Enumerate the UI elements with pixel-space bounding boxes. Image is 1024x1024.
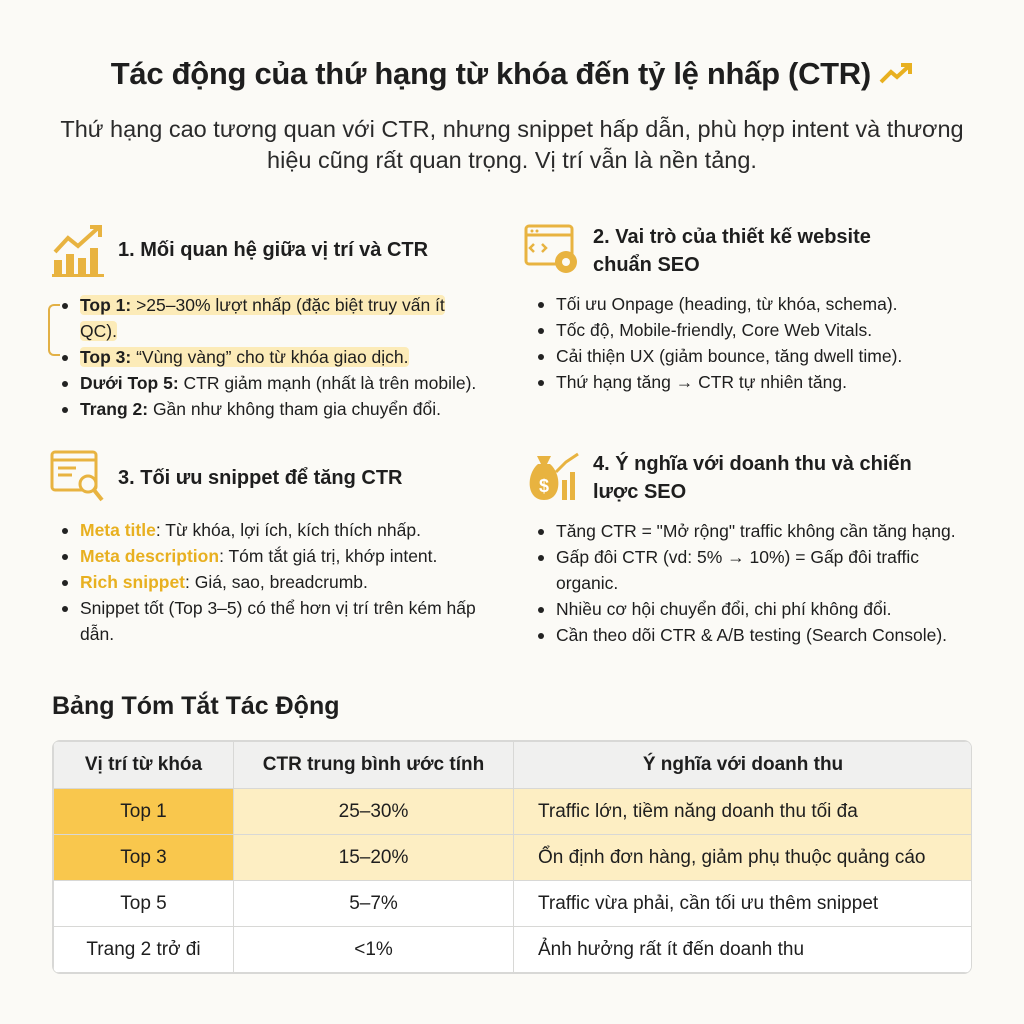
bullets 1: Top 1: >25–30% lượt nhấp (đặc biệt truy vấn ít xyxy=(80,295,445,315)
summary table: Traffic lớn, tiềm năng doanh thu tối đa xyxy=(538,800,858,822)
bullets 2: Tối ưu Onpage (heading, từ khóa, schema). xyxy=(556,294,898,314)
summary table: Top 3 xyxy=(120,846,167,868)
summary table: Top 5 xyxy=(120,892,167,914)
heading 4 xyxy=(593,452,912,503)
icon: money bag chart: $ xyxy=(539,476,549,496)
title: Tác động của thứ hạng từ khóa đến tỷ lệ nhấp (CTR) xyxy=(111,56,871,91)
table heading: Bảng Tóm Tắt Tác Động xyxy=(52,692,340,720)
summary table: 25–30% xyxy=(339,800,408,822)
panel: section 1 xyxy=(48,225,476,419)
summary table: Vị trí từ khóa xyxy=(85,754,202,775)
bullets 1: Dưới Top 5: CTR giảm mạnh (nhất là trên mobile). xyxy=(80,373,476,393)
heading 4: lược SEO xyxy=(593,481,686,503)
icon: snippet search xyxy=(50,450,104,502)
bullets 3: Meta description: Tóm tắt giá trị, khớp intent. xyxy=(80,546,437,566)
icon: website gear xyxy=(524,224,577,273)
bullets 4 xyxy=(538,521,956,645)
bullets 4: Gấp đôi CTR (vd: 5% → 10%) = Gấp đôi traffic xyxy=(556,547,919,567)
heading 1: 1. Mối quan hệ giữa vị trí và CTR xyxy=(118,239,428,261)
bracket connector xyxy=(48,304,60,356)
heading 3: 3. Tối ưu snippet để tăng CTR xyxy=(118,467,402,489)
bullets 3: Rich snippet: Giá, sao, breadcrumb. xyxy=(80,572,368,592)
heading 2: 2. Vai trò của thiết kế website xyxy=(593,226,871,248)
bullets 1: QC). xyxy=(80,321,117,341)
bullets 4: Nhiều cơ hội chuyển đổi, chi phí không đổi. xyxy=(556,599,891,619)
summary table: 5–7% xyxy=(349,892,398,914)
summary table: Ảnh hưởng rất ít đến doanh thu xyxy=(538,938,804,960)
bullets 2 xyxy=(538,294,902,392)
bullets 4: organic. xyxy=(556,573,618,593)
bullets 4: Cần theo dõi CTR & A/B testing (Search Console). xyxy=(556,625,947,645)
summary table: CTR trung bình ước tính xyxy=(263,754,484,775)
bullets 3: Meta title: Từ khóa, lợi ích, kích thích nhấp. xyxy=(80,520,421,540)
subtitle: Thứ hạng cao tương quan với CTR, nhưng snippet hấp dẫn, phù hợp intent và thương xyxy=(60,116,964,142)
heading 2: chuẩn SEO xyxy=(593,254,700,276)
panel: section 2 xyxy=(524,224,902,392)
icon: money bag chart xyxy=(530,452,579,500)
bullets 1 xyxy=(62,295,476,419)
summary table: Ổn định đơn hàng, giảm phụ thuộc quảng cáo xyxy=(538,846,925,868)
bullets 2: Cải thiện UX (giảm bounce, tăng dwell time). xyxy=(556,346,902,366)
heading 2 xyxy=(593,226,871,276)
bullets 3: Snippet tốt (Top 3–5) có thể hơn vị trí trên kém hấp dẫn. xyxy=(80,598,476,644)
panel: section 3 xyxy=(50,450,476,644)
icon: growth chart xyxy=(52,225,104,277)
summary table: Traffic vừa phải, cần tối ưu thêm snippet xyxy=(538,892,878,914)
bullets 1: Top 3: “Vùng vàng” cho từ khóa giao dịch. xyxy=(80,347,409,367)
heading 4: 4. Ý nghĩa với doanh thu và chiến xyxy=(593,453,912,475)
summary table: Top 1 xyxy=(120,800,167,822)
bullets 3 xyxy=(62,520,476,644)
bullets 2: Tốc độ, Mobile-friendly, Core Web Vitals. xyxy=(556,320,872,340)
bullets 2: Thứ hạng tăng → CTR tự nhiên tăng. xyxy=(556,372,847,392)
summary table xyxy=(52,740,972,974)
summary table: Ý nghĩa với doanh thu xyxy=(643,754,843,775)
panel: section 4 xyxy=(530,452,956,645)
subtitle: hiệu cũng rất quan trọng. Vị trí vẫn là nền tảng. xyxy=(267,147,757,173)
subtitle xyxy=(60,116,964,173)
summary table: <1% xyxy=(354,938,393,960)
bullets 4: Tăng CTR = "Mở rộng" traffic không cần tăng hạng. xyxy=(556,521,956,541)
summary table: Trang 2 trở đi xyxy=(86,938,201,960)
bullets 1: Trang 2: Gần như không tham gia chuyển đổi. xyxy=(80,399,441,419)
summary table: 15–20% xyxy=(339,846,408,868)
